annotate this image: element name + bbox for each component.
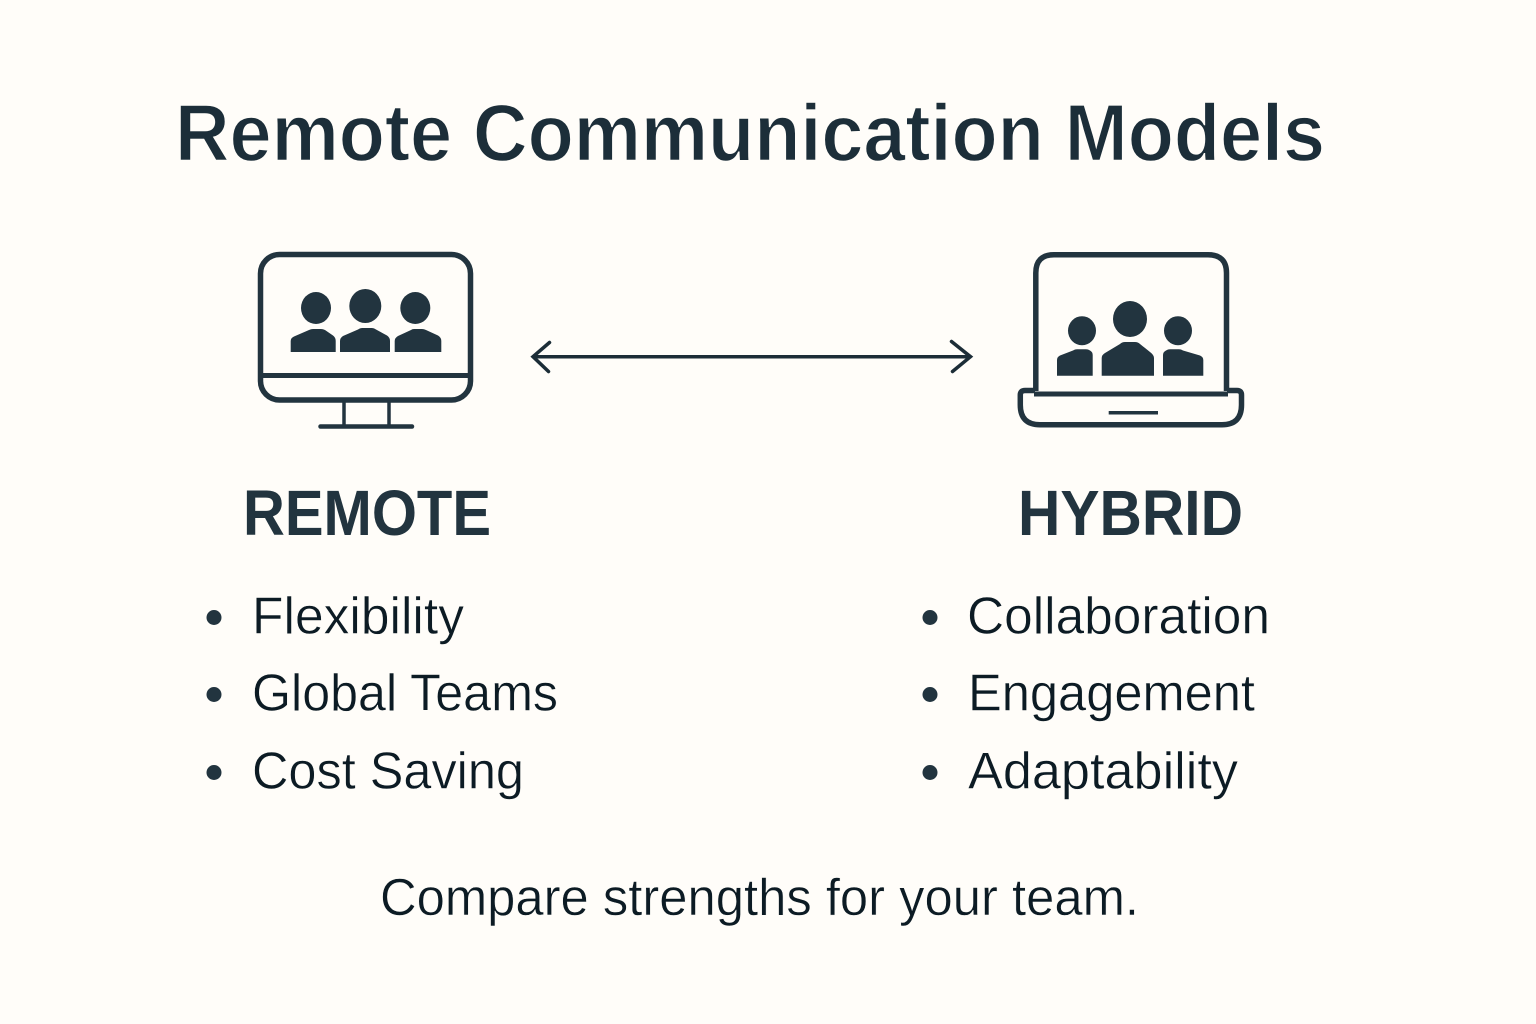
list: remote strengths: Global Teams [252, 664, 558, 722]
list: hybrid strengths: Collaboration [967, 588, 1270, 646]
list: remote strengths: Cost Saving [252, 742, 524, 800]
list: remote strengths: Flexibility [252, 588, 464, 646]
heading: HYBRID: HYBRID [1018, 477, 1243, 549]
closing note: Compare strengths for your team. [380, 869, 1139, 927]
icon: desktop monitor with three people [260, 254, 471, 426]
list: hybrid strengths: Adaptability [968, 742, 1238, 800]
list: remote strengths [206, 588, 558, 800]
heading: REMOTE: REMOTE [243, 477, 491, 549]
list: hybrid strengths [922, 588, 1270, 800]
icon: laptop with three people [1020, 255, 1242, 425]
title: Remote Communication Models [175, 88, 1325, 178]
double-headed arrow [533, 342, 970, 372]
list: hybrid strengths: Engagement [968, 664, 1256, 722]
